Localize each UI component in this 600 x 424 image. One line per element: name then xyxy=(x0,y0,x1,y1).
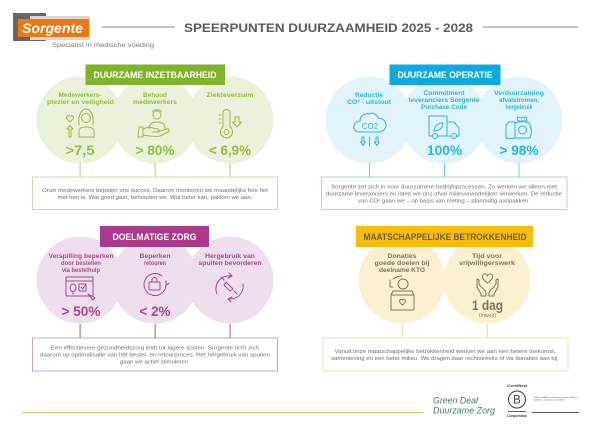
header rule left xyxy=(102,26,175,28)
icon: thermometer xyxy=(219,110,242,138)
labels yellow: Tijd voor xyxy=(472,254,503,260)
heading purple: DOELMATIGE ZORG xyxy=(112,232,196,242)
labels purple: door bestellen xyxy=(61,261,101,267)
connectors yellow xyxy=(402,324,488,338)
icon: syringe recycling xyxy=(216,273,243,302)
labels purple: Hergebruik van xyxy=(205,254,255,260)
values green: >7,5 xyxy=(66,142,95,158)
text box purple: Een effectievere gezondheidszorg leidt tot lagere kosten. Sorgente richt zich xyxy=(51,346,259,352)
labels green: Medewerkers- xyxy=(58,93,102,99)
logo: Certified B Corporation: Corporation xyxy=(507,414,528,418)
logo: Sorgente: Sorgente xyxy=(22,20,83,36)
values purple xyxy=(62,303,171,319)
labels green xyxy=(47,93,254,106)
text box yellow: samenleving en een beter milieu. We dragen daar rechtstreeks of via donaties aan bij. xyxy=(331,356,559,362)
heading yellow xyxy=(356,226,533,247)
icon: CO2 cloud xyxy=(354,113,386,146)
text box blue: van CO² gaan we – op basis van meting – planmatig aanpakken. xyxy=(358,198,530,204)
labels yellow: Donaties xyxy=(388,254,417,260)
heading yellow: MAATSCHAPPELIJKE BETROKKENHEID xyxy=(364,232,527,242)
connectors green xyxy=(80,163,231,177)
labels purple xyxy=(48,254,262,274)
labels blue: afvalstromen, xyxy=(499,98,539,104)
circles green xyxy=(36,76,274,164)
text box green xyxy=(32,177,278,210)
labels blue: CO² - uitstoot xyxy=(347,99,391,106)
labels green: medewerkers xyxy=(133,100,178,106)
text box purple xyxy=(32,338,278,371)
icon: woman with heart xyxy=(66,109,94,137)
connectors blue xyxy=(369,163,520,177)
labels purple: via bestelhulp xyxy=(62,268,100,274)
heading green xyxy=(86,64,225,85)
logo tagline: Specialist in medische voeding xyxy=(52,42,155,49)
text box blue: Sorgente zet zich in voor duurzamere bedrijfsprocessen. Zo werken we alleen met xyxy=(331,184,558,190)
panel: duurzame operatie xyxy=(322,64,567,210)
circles blue xyxy=(326,76,562,164)
B Corp tagline: hebben op onze wereld." xyxy=(533,398,565,402)
text box yellow xyxy=(323,338,568,371)
values purple: < 2% xyxy=(140,303,171,319)
labels blue: Verduurzaming xyxy=(494,91,544,97)
circles purple xyxy=(36,236,274,324)
heading blue: DUURZAME OPERATIE xyxy=(398,70,492,80)
icon: truck with leaf xyxy=(429,116,459,138)
labels purple: Verspilling beperken xyxy=(48,254,114,260)
labels green: plezier en veiligheid xyxy=(47,100,114,106)
value yellow xyxy=(472,297,503,319)
icon: order screen xyxy=(66,277,95,300)
text box purple: gaan we actief stimuleren. xyxy=(120,360,190,366)
header rule right xyxy=(483,26,578,28)
labels purple: retouren xyxy=(144,261,166,267)
text box purple: daarom op optimalisatie van het bestel- en retourproces. Het hergebruik van spuiten xyxy=(40,352,270,358)
heading blue xyxy=(390,64,500,85)
logo: Sorgente xyxy=(13,13,90,41)
title: SPEERPUNTEN DUURZAAMHEID 2025 - 2028 xyxy=(184,23,474,35)
panel: doelmatige zorg xyxy=(32,226,278,371)
text box blue: duurzame leveranciers en laten we ons afval milieuvriendelijker verwerken. De reductie xyxy=(326,192,562,198)
labels blue: Commitment xyxy=(424,91,464,97)
icon: CO2 cloud: CO2 xyxy=(362,122,379,131)
logo: Certified B Corporation xyxy=(507,383,528,418)
icon: hands with heart xyxy=(477,274,498,296)
panel: duurzame inzetbaarheid xyxy=(32,64,278,210)
labels yellow xyxy=(374,254,516,274)
text box green: Onze medewerkers bepalen ons succes. Daarom monitoren we maandelijks hoe het xyxy=(42,188,269,194)
values blue xyxy=(427,142,539,158)
logo: Green Deal Duurzame Zorg: Green Deal xyxy=(433,396,479,406)
labels purple: Beperken xyxy=(140,254,171,260)
labels blue: leveranciers Sorgente xyxy=(408,98,480,104)
heading purple xyxy=(100,226,209,247)
values blue: > 98% xyxy=(500,142,539,158)
labels green: Ziekteverzuim xyxy=(206,93,254,99)
value yellow: (/mw/jr) xyxy=(479,313,496,319)
values blue: 100% xyxy=(427,142,463,158)
B Corp tagline xyxy=(533,396,579,402)
logo: Green Deal Duurzame Zorg xyxy=(433,396,495,416)
icon: hand holding worker xyxy=(138,110,169,137)
labels yellow: goede doelen bij xyxy=(374,261,430,267)
labels blue: Reductie xyxy=(355,93,384,99)
value yellow: 1 dag xyxy=(472,297,503,313)
icon: returns bag xyxy=(144,273,169,295)
text box blue xyxy=(322,177,567,210)
values green xyxy=(66,142,252,158)
labels blue: hergebruik xyxy=(506,105,533,111)
icon: donation box xyxy=(390,276,414,310)
logo: Certified B Corporation: B xyxy=(513,394,521,406)
logo: Certified B Corporation: Certified xyxy=(507,383,528,388)
icon: recycling bag and bottle xyxy=(506,117,531,139)
panel: maatschappelijke betrokkenheid xyxy=(323,226,568,371)
footer rule right xyxy=(532,412,579,413)
values green: < 6,9% xyxy=(209,142,252,158)
labels purple: spuiten bevorderen xyxy=(198,261,262,267)
footer rule xyxy=(22,411,424,414)
labels yellow: deelname KTO xyxy=(379,268,425,274)
text box yellow: Vanuit onze maatschappelijke betrokkenheid werken we aan een betere toekomst, xyxy=(334,349,556,355)
labels green: Behoud xyxy=(143,93,167,99)
values purple: > 50% xyxy=(62,303,101,319)
labels yellow: vrijwilligerswerk xyxy=(459,261,516,267)
labels blue xyxy=(347,91,544,111)
circles yellow xyxy=(358,236,530,324)
heading green: DUURZAME INZETBAARHEID xyxy=(94,70,217,80)
labels blue: Purchase Code xyxy=(421,105,468,111)
logo: Green Deal Duurzame Zorg: Duurzame Zorg xyxy=(433,406,495,416)
B Corp tagline: "We willen een positief effect xyxy=(533,396,579,399)
text box green: met hen is. Wat goed gaat, behouden we. Wat beter kan, pakken we aan. xyxy=(58,195,252,201)
connectors purple xyxy=(80,324,231,338)
values green: > 80% xyxy=(136,142,175,158)
